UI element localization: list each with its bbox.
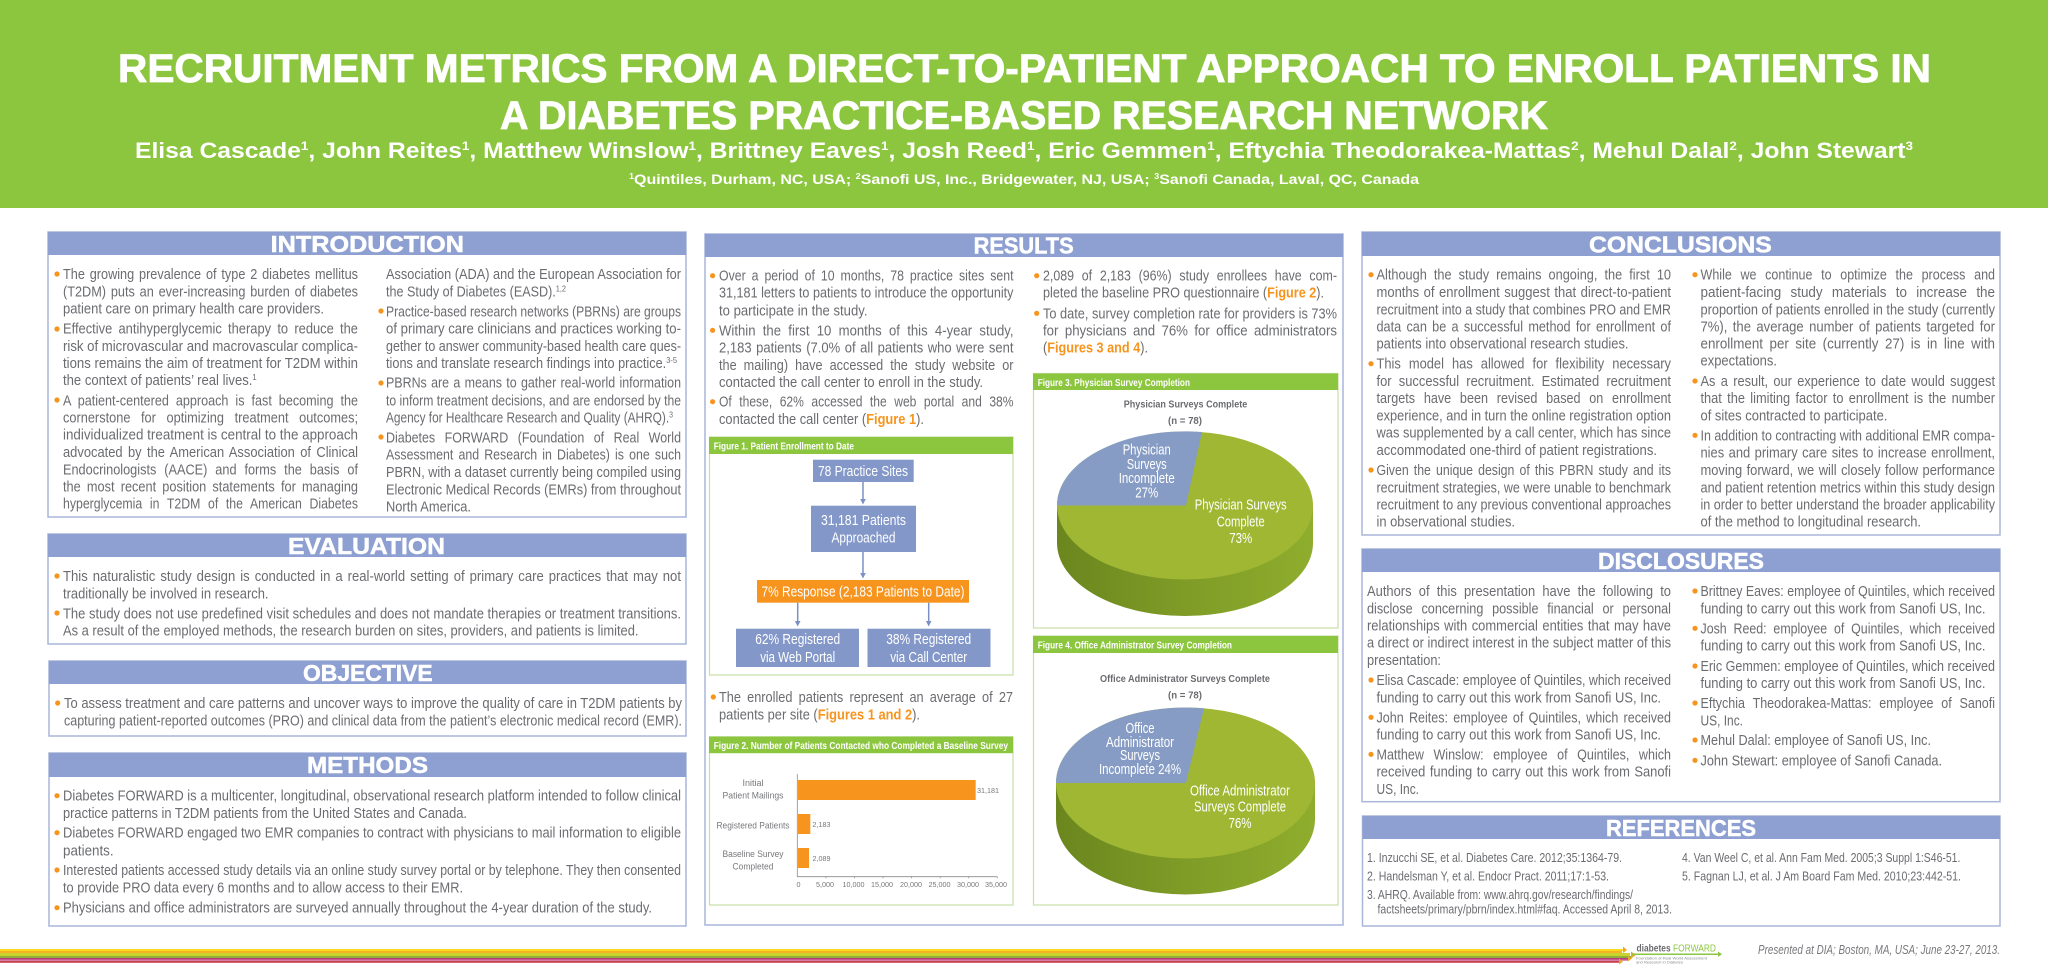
flow box: practice sites: 78 Practice Sites [818, 464, 908, 480]
authors: 3 [1906, 139, 1913, 153]
text: disclosures left column: funding to carry out this work from Sanofi US, Inc. [1376, 690, 1661, 706]
text: methods bullets: Interested patients accessed study details via an online study survey portal or by telephone. They then consented [63, 863, 681, 879]
text: disclosures right column: Josh Reed: employee of Quintiles, which received [1700, 621, 1995, 637]
text: evaluation bullets: This naturalistic study design is conducted in a real-world setting of primary care practices that may not [63, 569, 681, 585]
text: conclusions left column: months of enrollment suggest that direct-to-patient [1376, 285, 1671, 301]
category labels: Registered Patients [716, 820, 790, 832]
flow box: response [757, 580, 969, 603]
flow box: patients approached: 31,181 Patients [821, 513, 906, 529]
text: introduction right column: Assessment and Research in Diabetes) is one such [386, 448, 681, 464]
text: conclusions left column: recruitment into a study that combines PRO and EMR [1376, 302, 1671, 318]
text: results left column: contacted the call center to enroll in the study. [719, 375, 983, 391]
text: disclosures left column: Elisa Cascade: employee of Quintiles, which received [1376, 673, 1671, 689]
text: introduction left column: patient care on primary health care providers. [63, 301, 324, 317]
pie 3 title: Physician Surveys Complete [1124, 398, 1247, 410]
text: introduction right column: PBRN, with a dataset currently being compiled using [386, 465, 681, 481]
text: conclusions left column: Given the unique design of this PBRN study and its [1376, 463, 1671, 479]
text: disclosures right column: funding to carry out this work from Sanofi US, Inc. [1700, 639, 1986, 655]
text: references left column [1367, 851, 1672, 917]
text: disclosures left column: a direct or indirect interest in the subject matter of this [1367, 636, 1671, 652]
text: disclosures right column [1692, 584, 1995, 769]
text: disclosures right column: funding to carry out this work from Sanofi US, Inc. [1700, 601, 1986, 617]
logo: diabetes FORWARD: diabetes FORWARD [1636, 942, 1716, 954]
text: conclusions left column: for successful recruitment. Estimated recruitment [1376, 374, 1671, 390]
text: conclusions left column: in observational studies. [1376, 514, 1515, 530]
heading: evaluation: EVALUATION [288, 533, 445, 559]
arrow: sites to patients [860, 482, 866, 504]
axis tick labels: 25,000 [929, 880, 950, 889]
text: disclosures right column: Eric Gemmen: employee of Quintiles, which received [1700, 659, 1995, 675]
heading: objective: OBJECTIVE [303, 660, 433, 686]
axis tick labels: 30,000 [957, 880, 979, 889]
text: disclosures right column: US, Inc. [1700, 713, 1743, 729]
authors: 1 [1027, 139, 1035, 153]
pie 4 incomplete label: Office [1126, 721, 1154, 737]
pie 4 complete label: Surveys Complete [1194, 800, 1286, 816]
affiliations: Quintiles, Durham, NC, USA; [634, 171, 856, 187]
panel: methods [49, 752, 686, 926]
text: introduction left column [54, 267, 359, 512]
text: conclusions left column: recruitment strategies, we were unable to benchmark [1376, 480, 1672, 496]
text: introduction right column: Association (ADA) and the European Association for [386, 267, 681, 283]
axis tick labels: 35,000 [985, 880, 1007, 889]
footer arrow stripes [0, 946, 1636, 964]
pie 4 complete label [1190, 784, 1290, 832]
text: introduction left column: advocated by the American Association of Clinical [63, 445, 358, 461]
text: introduction right column [378, 267, 681, 515]
text: enrolled patients bullet [711, 690, 1013, 723]
text: disclosures left column: presentation: [1367, 653, 1441, 669]
text: results right column [1034, 269, 1337, 357]
text: methods bullets: Diabetes FORWARD is a multicenter, longitudinal, observational research platform intended to follow clinical [63, 789, 681, 805]
text: introduction right column: Diabetes FORWARD (Foundation of Real World [386, 430, 681, 446]
text: introduction left column: tions remains the aim of treatment for T2DM within [63, 356, 358, 372]
category labels [716, 778, 790, 872]
pie 3 incomplete label: Incomplete [1119, 471, 1175, 487]
text: methods bullets: Physicians and office administrators are surveyed annually throughout the 4-year duration of the study. [63, 901, 652, 917]
text: evaluation bullets: The study does not use predefined visit schedules and does not mandate therapies or treatment transitions. [63, 606, 681, 622]
text: results right column: for physicians and 76% for office administrators [1043, 323, 1337, 339]
text: introduction right column: tions and translate research findings into practice. [386, 356, 705, 372]
heading: conclusions: CONCLUSIONS [1589, 232, 1772, 258]
text: conclusions left column: data can be a successful method for enrollment of [1376, 320, 1672, 336]
text: introduction right column: North America. [386, 499, 471, 515]
arrow: patients to response [860, 552, 866, 578]
figure 3: physician pie chart [1033, 374, 1338, 628]
text: enrolled patients bullet: The enrolled patients represent an average of 27 [719, 690, 1013, 706]
text: introduction right column: PBRNs are a means to gather real-world information [386, 376, 681, 392]
text: results right column: pleted the baseline PRO questionnaire (Figure 2). [1043, 286, 1324, 302]
figure 3 title: Figure 3. Physician Survey Completion [1038, 377, 1190, 389]
pie 3 complete label: Complete [1217, 514, 1265, 530]
text: conclusions right column: As a result, our experience to date would suggest [1700, 374, 1995, 390]
text: introduction left column: the most recent position statements for managing [63, 480, 358, 496]
text: introduction right column: Agency for Healthcare Research and Quality (AHRQ). [386, 411, 733, 427]
authors: , Matthew Winslow [469, 138, 689, 163]
authors: , Eric Gemmen [1034, 138, 1207, 163]
text: conclusions right column: moving forward, we will closely follow performance [1700, 463, 1995, 479]
text: results left column: 31,181 letters to patients to introduce the opportunity [719, 286, 1014, 302]
text: references left column: 2. Handelsman Y, et al. Endocr Pract. 2011;17:1-53. [1367, 870, 1609, 884]
pie 3 incomplete label: Physician [1123, 442, 1171, 458]
value labels [812, 786, 999, 863]
text: methods bullets [54, 789, 681, 917]
text: conclusions left column: was supplemented by a call center, which has since [1376, 426, 1671, 442]
text: introduction right column: 3-5 [666, 355, 677, 365]
text: introduction left column: the context of patients’ real lives. [63, 373, 273, 389]
arrow: response to web portal [795, 603, 800, 626]
text: conclusions left column: experience, and in turn the online registration option [1376, 408, 1671, 424]
category labels: Patient Mailings [722, 790, 784, 802]
text: disclosures right column: Mehul Dalal: employee of Sanofi US, Inc. [1700, 733, 1931, 749]
text: objective: capturing patient-reported outcomes (PRO) and clinical data from the patient’s electronic medical record (EMR). [64, 713, 682, 729]
text: disclosures left column [1367, 584, 1671, 798]
text: conclusions right column: expectations. [1700, 354, 1777, 370]
text: results right column: To date, survey completion rate for providers is 73% [1043, 306, 1337, 322]
text: conclusions left column: patients into observational research studies. [1376, 337, 1628, 353]
panel: introduction [48, 231, 686, 517]
text: disclosures right column: Eftychia Theodorakea-Mattas: employee of Sanofi [1700, 696, 1995, 712]
panel: evaluation [48, 533, 686, 644]
text: introduction left column: cornerstone for optimizing treatment outcomes; [63, 411, 358, 427]
text: conclusions right column: nies and primary care sites to increase enrollment, [1700, 446, 1995, 462]
text: conclusions right column: that the limiting factor to enrollment is the number [1700, 391, 1995, 407]
arrow: response to call center [926, 603, 932, 626]
heading: introduction: INTRODUCTION [271, 231, 464, 257]
text: introduction right column: of primary care clinicians and practices working to- [386, 322, 681, 338]
text: introduction right column: 1,2 [556, 283, 566, 293]
text: introduction left column: Effective antihyperglycemic therapy to reduce the [63, 322, 358, 338]
authors: , John Reites [308, 138, 462, 163]
text: conclusions left column: targets have been revised based on enrollment [1376, 391, 1671, 407]
category labels: Baseline Survey [722, 849, 784, 860]
text: conclusions right column [1692, 268, 1996, 530]
flow box: practice sites [813, 460, 914, 482]
heading: methods: METHODS [307, 752, 428, 778]
text: conclusions left column: This model has allowed for flexibility necessary [1376, 357, 1672, 373]
authors: 2 [1571, 139, 1579, 153]
figure 4 title: Figure 4. Office Administrator Survey Completion [1038, 640, 1232, 652]
text: introduction left column: risk of microvascular and macrovascular complica- [63, 339, 358, 355]
figure 2: bar chart [709, 737, 1013, 905]
text: conclusions right column: While we continue to optimize the process and [1700, 268, 1995, 284]
text: conclusions right column: of sites contracted to participate. [1700, 408, 1887, 424]
text: introduction right column: Practice-based research networks (PBRNs) are groups [386, 304, 681, 320]
affiliations: 3 [1154, 172, 1160, 181]
affiliations: 1 [629, 172, 635, 181]
flow box: web portal [736, 629, 859, 667]
text: objective [55, 696, 683, 729]
text: conclusions right column: of the method to longitudinal research. [1700, 514, 1921, 530]
flow box: patients approached [811, 506, 916, 552]
pie 4 incomplete label: Administrator [1106, 735, 1174, 751]
text: references left column: 1. Inzucchi SE, et al. Diabetes Care. 2012;35:1364-79. [1367, 851, 1622, 865]
authors: , Mehul Dalal [1579, 138, 1729, 163]
pie 3 graphic [1057, 431, 1313, 616]
bars [798, 780, 976, 868]
text: introduction left column: The growing prevalence of type 2 diabetes mellitus [63, 267, 358, 283]
text: introduction left column: A patient-centered approach is fast becoming the [63, 393, 358, 409]
axis tick labels: 10,000 [843, 880, 864, 889]
pie 4 complete label: Office Administrator [1190, 784, 1290, 800]
text: disclosures left column: US, Inc. [1376, 782, 1419, 798]
affiliations: Sanofi Canada, Laval, QC, Canada [1159, 171, 1419, 187]
text: methods bullets: patients. [63, 843, 114, 859]
authors: , Josh Reed [889, 138, 1027, 163]
figure 4: office administrator pie chart [1033, 636, 1338, 905]
axis tick labels: 20,000 [900, 880, 922, 889]
text: introduction left column: Endocrinologists (AACE) and forms the basis of [63, 462, 359, 478]
text: results left column: Of these, 62% accessed the web portal and 38% [719, 395, 1014, 411]
logo: diabetes FORWARD [1632, 942, 1722, 964]
pie 4 graphic [1056, 708, 1315, 894]
pie 4 title [1100, 673, 1270, 702]
axis tick labels: 15,000 [871, 880, 893, 889]
value labels: 2,089 [812, 854, 830, 863]
axis tick labels [796, 880, 1007, 889]
flow box: web portal: via Web Portal [760, 650, 835, 666]
text: introduction right column: to inform treatment decisions, and are endorsed by the [386, 393, 681, 409]
pie 3 title: (n = 78) [1168, 415, 1202, 427]
text: conclusions left column [1368, 268, 1672, 530]
text: conclusions right column: in order to better understand the broader applicability [1700, 497, 1996, 513]
text: references left column: 3. AHRQ. Available from: www.ahrq.gov/research/findings/ [1367, 888, 1633, 902]
text: results left column: Over a period of 10 months, 78 practice sites sent [719, 269, 1014, 285]
flow box: call center: via Call Center [890, 650, 967, 666]
pie 3 complete label: 73% [1229, 531, 1252, 547]
title: A DIABETES PRACTICE-BASED RESEARCH NETWORK [500, 94, 1548, 138]
text: disclosures left column: John Reites: employee of Quintiles, which received [1376, 710, 1671, 726]
text: conclusions right column: patient-facing study materials to increase the [1700, 285, 1995, 301]
category labels: Initial [742, 778, 764, 789]
text: introduction left column: 1 [252, 372, 257, 382]
authors: 1 [462, 139, 470, 153]
logo: diabetes FORWARD: and Research in Diabetes [1636, 960, 1683, 964]
flow box: web portal: 62% Registered [755, 632, 840, 648]
value labels: 2,183 [812, 820, 830, 829]
text: results left column [710, 269, 1014, 428]
pie 3 incomplete label: 27% [1135, 486, 1158, 502]
text: results left column: contacted the call center (Figure 1). [719, 412, 924, 428]
text: conclusions right column: proportion of patients enrolled in the study (currently [1700, 302, 1996, 318]
title: RECRUITMENT METRICS FROM A DIRECT-TO-PATIENT APPROACH TO ENROLL PATIENTS IN [118, 47, 1931, 91]
text: evaluation bullets: As a result of the employed methods, the research burden on sites, providers, and patients is limited. [63, 624, 638, 640]
title [118, 47, 1931, 138]
text: disclosures right column: funding to carry out this work from Sanofi US, Inc. [1700, 676, 1986, 692]
text: results right column: (Figures 3 and 4). [1043, 341, 1148, 357]
text: disclosures left column: Authors of this presentation have the following to [1367, 584, 1671, 600]
text: references left column: factsheets/primary/pbrn/index.html#faq. Accessed April 8, 2013. [1378, 903, 1672, 917]
figure 1 title: Figure 1. Patient Enrollment to Date [714, 440, 854, 452]
axis tick labels: 0 [796, 880, 800, 889]
axis tick labels: 5,000 [816, 880, 834, 889]
affiliations: Sanofi US, Inc., Bridgewater, NJ, USA; [861, 171, 1154, 187]
text: evaluation bullets: traditionally be involved in research. [63, 586, 268, 602]
affiliations: 2 [856, 172, 861, 181]
text: objective: To assess treatment and care patterns and uncover ways to improve the quality of care in T2DM patients by [64, 696, 683, 712]
pie 4 title: Office Administrator Surveys Complete [1100, 673, 1270, 685]
text: disclosures left column: disclose concerning possible financial or personal [1367, 601, 1671, 617]
panel: results [705, 232, 1343, 925]
text: results right column: 2,089 of 2,183 (96%) study enrollees have com- [1043, 269, 1337, 285]
text: conclusions left column: accommodated one-third of patient registrations. [1376, 443, 1657, 459]
text: introduction right column: 3 [669, 410, 673, 420]
text: disclosures left column: funding to carry out this work from Sanofi US, Inc. [1376, 728, 1661, 744]
value labels: 31,181 [977, 786, 999, 795]
text: introduction right column: the Study of Diabetes (EASD). [386, 284, 582, 300]
axes [797, 774, 997, 878]
text: references right column: 5. Fagnan LJ, et al. J Am Board Fam Med. 2010;23:442-51. [1682, 870, 1961, 884]
text: introduction left column: hyperglycemia in T2DM of the American Diabetes [63, 496, 358, 512]
flow box: call center: 38% Registered [886, 632, 971, 648]
pie 3 incomplete label: Surveys [1127, 457, 1167, 473]
authors: , Eftychia Theodorakea-Mattas [1215, 138, 1571, 163]
heading: results: RESULTS [974, 232, 1074, 258]
text: disclosures left column: Matthew Winslow: employee of Quintiles, which [1376, 747, 1671, 763]
text: methods bullets: to provide PRO data every 6 months and to allow access to their EMR. [63, 880, 463, 896]
text: results left column: Within the first 10 months of this 4-year study, [719, 323, 1014, 339]
pie 4 complete label: 76% [1228, 816, 1252, 832]
authors: 1 [301, 139, 309, 153]
text: introduction right column: gether to answer community-based health care ques- [386, 339, 681, 355]
authors: , John Stewart [1737, 138, 1906, 163]
pie 4 title: (n = 78) [1168, 690, 1202, 702]
heading: references: REFERENCES [1606, 815, 1756, 841]
text: introduction right column: Electronic Medical Records (EMRs) from throughout [386, 482, 681, 498]
pie 3 complete label [1195, 498, 1287, 547]
authors: 1 [1207, 139, 1215, 153]
text: disclosures left column: received funding to carry out this work from Sanofi [1376, 765, 1671, 781]
text: conclusions left column: Although the study remains ongoing, the first 10 [1376, 268, 1671, 284]
figure 1: patient enrollment flowchart [709, 437, 1013, 675]
text: disclosures right column: Brittney Eaves: employee of Quintiles, which received [1700, 584, 1995, 600]
text: conclusions right column: 7%), the average number of patients targeted for [1700, 320, 1995, 336]
pie 4 incomplete label [1099, 721, 1181, 778]
flow box: patients approached: Approached [832, 531, 896, 547]
pie 4 incomplete label: Incomplete 24% [1099, 762, 1181, 778]
authors: 1 [688, 139, 696, 153]
pie 4 incomplete label: Surveys [1120, 748, 1160, 764]
authors: Elisa Cascade [135, 138, 283, 163]
pie 3 incomplete label [1119, 442, 1175, 502]
figure 2 title: Figure 2. Number of Patients Contacted who Completed a Baseline Survey [714, 740, 1008, 752]
text: introduction left column: (T2DM) puts an ever-increasing burden of diabetes [63, 284, 358, 300]
text: methods bullets: practice patterns in T2DM patients from the United States and Canada. [63, 806, 467, 822]
flow box: call center [868, 629, 990, 667]
panel: conclusions [1362, 232, 2000, 535]
flow box: response: 7% Response (2,183 Patients to Date) [762, 585, 964, 601]
text: evaluation bullets [54, 569, 681, 640]
authors: , Brittney Eaves [696, 138, 881, 163]
authors: 2 [1729, 139, 1737, 153]
pie 3 title [1124, 398, 1247, 427]
text: conclusions right column: and patient retention metrics within this study design [1700, 480, 1995, 496]
panel: objective [49, 660, 686, 736]
authors: 1 [881, 139, 889, 153]
text: conclusions left column: recruitment to any previous conventional approaches [1376, 497, 1671, 513]
panel: disclosures [1362, 548, 2000, 802]
text: introduction left column: individualized treatment is central to the approach [63, 428, 358, 444]
panel: references [1362, 815, 2000, 926]
text: references right column [1682, 851, 1961, 884]
header banner [0, 0, 2048, 208]
text: conclusions right column: In addition to contracting with additional EMR compa- [1700, 428, 1995, 444]
text: disclosures right column: John Stewart: employee of Sanofi Canada. [1700, 753, 1942, 769]
text: references right column: 4. Van Weel C, et al. Ann Fam Med. 2005;3 Suppl 1:S46-51. [1682, 851, 1960, 865]
heading: disclosures: DISCLOSURES [1598, 548, 1764, 574]
pie 3 complete label: Physician Surveys [1195, 498, 1287, 514]
category labels: Completed [732, 862, 774, 872]
text: results left column: 2,183 patients (7.0% of all patients who were sent [719, 341, 1014, 357]
text: enrolled patients bullet: patients per site (Figures 1 and 2). [719, 707, 920, 723]
text: disclosures left column: relationships with commercial entities that may have [1367, 619, 1671, 635]
logo: diabetes FORWARD: Foundation of Real World Assessment [1636, 956, 1707, 960]
text: results left column: the mailing) have accessed the study website or [719, 358, 1014, 374]
text: methods bullets: Diabetes FORWARD engaged two EMR companies to contract with physicians to mail information to eligible [63, 826, 681, 842]
text: results left column: to participate in the study. [719, 303, 868, 319]
text: conclusions right column: enrollment per site (currently 27) is in line with [1700, 337, 1995, 353]
